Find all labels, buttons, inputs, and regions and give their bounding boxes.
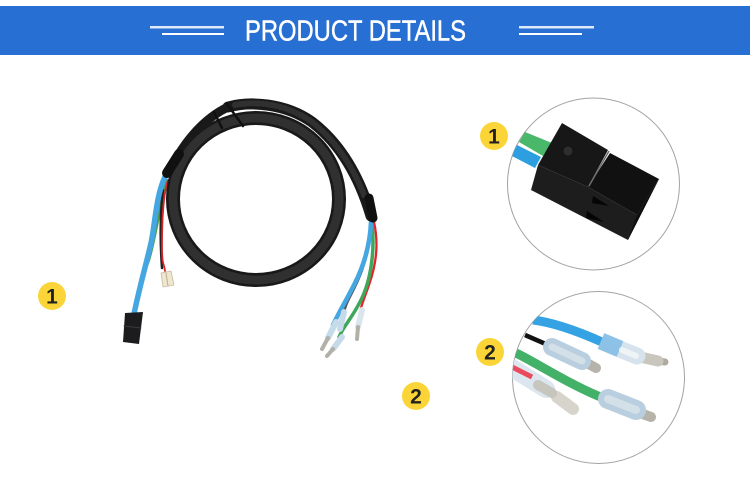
green wire and terminal	[516, 353, 651, 417]
heat shrink and cable ties	[167, 104, 373, 218]
right wires	[333, 222, 376, 337]
detail circle 2: terminals close-up	[512, 292, 684, 464]
number badge 1 on detail circle	[480, 122, 508, 150]
black wire and terminal	[525, 335, 596, 368]
detail circle 1: connector close-up	[508, 98, 680, 270]
red wire and terminal	[512, 367, 573, 409]
wire terminals	[322, 310, 362, 356]
number badge 2	[402, 382, 430, 410]
black connector	[123, 312, 143, 344]
white connector	[161, 271, 174, 287]
number badge 1 on detail circle: 1	[488, 126, 500, 148]
number badge 2 on detail circle: 2	[484, 342, 496, 364]
left wires	[134, 177, 168, 314]
braided sleeve loop	[170, 103, 371, 280]
product photo: cable harness	[123, 103, 376, 356]
number badge 2 on detail circle	[476, 338, 504, 366]
black connector body	[531, 123, 659, 240]
wires entering connector	[510, 132, 552, 168]
header banner	[0, 6, 750, 55]
number badge 1	[38, 282, 66, 310]
left decorative lines	[150, 26, 224, 35]
number badge 2: 2	[410, 386, 422, 408]
right decorative lines	[519, 26, 594, 35]
heading: PRODUCT DETAILS	[245, 16, 466, 48]
number badge 1: 1	[46, 286, 58, 308]
blue wire and terminal	[533, 320, 665, 362]
